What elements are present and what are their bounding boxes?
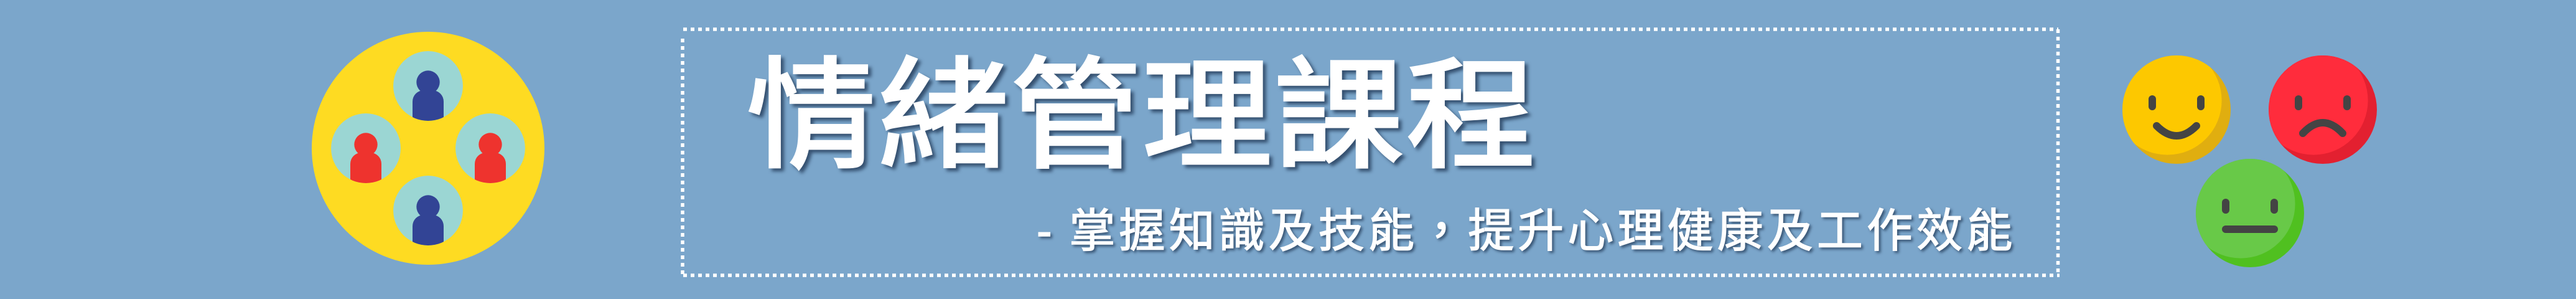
icon: sad face [2269,55,2377,164]
icon: group of people [312,32,544,265]
person: top [393,51,463,121]
icon: neutral face [2196,159,2304,267]
person: right [455,113,525,183]
person: bottom [393,176,463,245]
icon: happy face [2122,55,2231,164]
person: left [331,113,401,183]
subtitle: - 掌握知識及技能，提升心理健康及工作效能 [1037,205,2016,257]
dotted title frame [683,29,2060,275]
title: 情緒管理課程 [747,49,1538,184]
